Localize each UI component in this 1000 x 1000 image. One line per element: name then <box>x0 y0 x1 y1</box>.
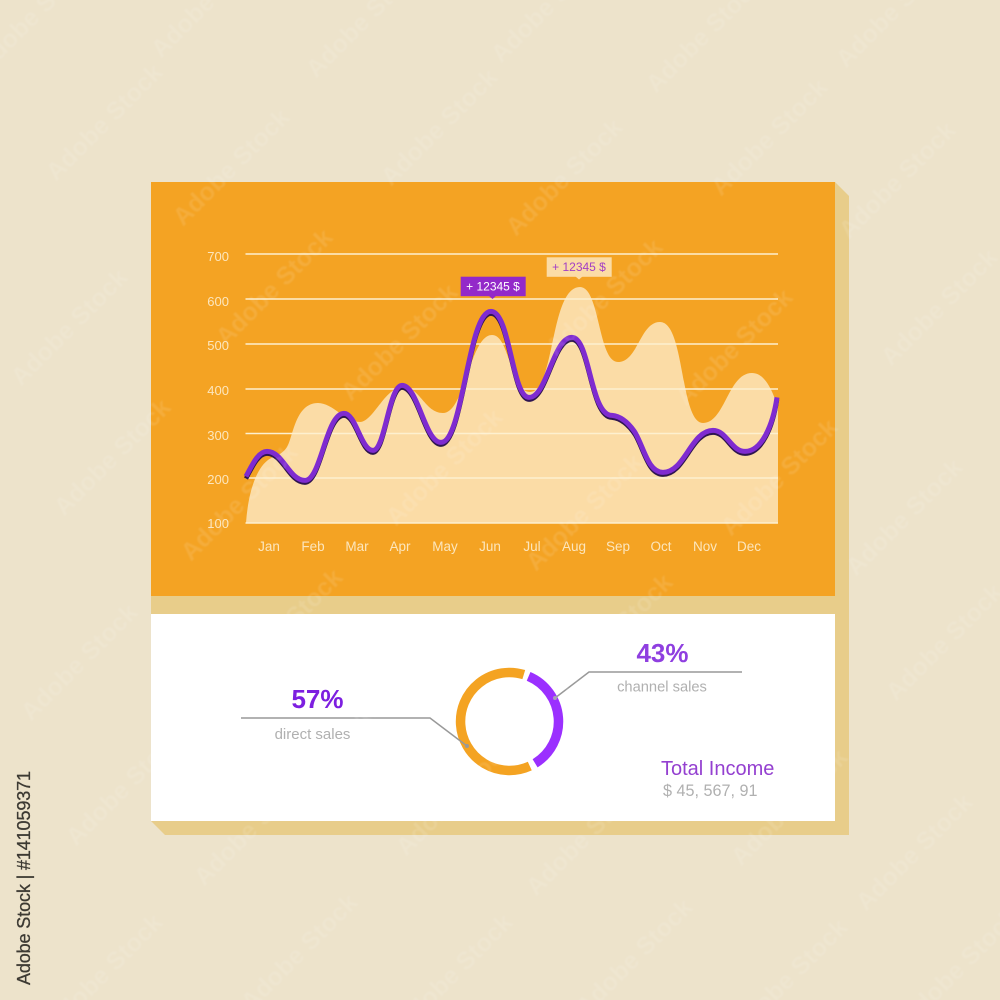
x axis month labels: Jul <box>523 539 541 554</box>
x axis month labels: Jun <box>479 539 501 554</box>
watermark pattern: Adobe Stock <box>220 563 348 691</box>
watermark pattern: Adobe Stock <box>833 116 961 244</box>
watermark pattern: Adobe Stock <box>520 773 648 901</box>
watermark pattern: Adobe Stock <box>520 448 648 576</box>
tooltip: cream value <box>547 257 612 280</box>
area series <box>246 287 778 523</box>
watermark pattern: Adobe Stock <box>167 103 295 231</box>
leader line: channel sales <box>553 672 742 700</box>
watermark pattern: Adobe Stock <box>15 598 143 726</box>
watermark pattern: Adobe Stock <box>48 393 176 521</box>
watermark pattern: Adobe Stock <box>715 413 843 541</box>
x axis month labels: Aug <box>562 539 586 554</box>
y axis labels <box>207 249 229 531</box>
x axis month labels: Nov <box>693 539 717 554</box>
y axis labels: 300 <box>207 428 229 443</box>
y axis labels: 200 <box>207 472 229 487</box>
donut chart <box>461 672 558 770</box>
x axis month labels: May <box>432 539 458 554</box>
total income value: $ 45, 567, 91 <box>663 782 758 800</box>
tooltip: cream value: + 12345 $ <box>552 260 606 274</box>
watermark pattern: Adobe Stock <box>210 223 338 351</box>
purple trend line <box>246 311 777 483</box>
watermark pattern: Adobe Stock <box>500 113 628 241</box>
stat: direct sales percent: 57% <box>291 684 344 714</box>
y axis labels: 500 <box>207 338 229 353</box>
watermark pattern: Adobe Stock <box>375 63 503 191</box>
panel shadow <box>151 182 849 835</box>
x axis month labels: Oct <box>650 539 672 554</box>
watermark pattern: Adobe Stock <box>550 568 678 696</box>
watermark pattern: Adobe Stock <box>380 403 508 531</box>
y axis labels: 600 <box>207 294 229 309</box>
grid lines <box>246 254 778 523</box>
panel: line chart <box>151 182 835 596</box>
watermark pattern: Adobe Stock <box>175 438 303 566</box>
watermark pattern: Adobe Stock <box>390 733 518 861</box>
leader line: direct sales <box>241 718 469 748</box>
watermark pattern: Adobe Stock <box>840 453 968 581</box>
y axis labels: 400 <box>207 383 229 398</box>
x axis month labels <box>258 539 761 554</box>
watermark pattern: Adobe Stock <box>875 243 1000 371</box>
x axis month labels: Jan <box>258 539 280 554</box>
tooltip: purple value: + 12345 $ <box>466 280 520 294</box>
panel: sales summary <box>151 614 835 821</box>
y axis labels: 700 <box>207 249 229 264</box>
label: direct sales: direct sales <box>275 726 350 743</box>
watermark pattern: Adobe Stock <box>345 608 473 736</box>
x axis month labels: Apr <box>389 539 411 554</box>
x axis month labels: Feb <box>301 539 325 554</box>
x axis month labels: Dec <box>737 539 761 554</box>
label: channel sales: channel sales <box>617 680 707 696</box>
watermark pattern: Adobe Stock <box>40 58 168 186</box>
watermark pattern: Adobe Stock <box>5 263 133 391</box>
watermark pattern: Adobe Stock <box>670 283 798 411</box>
watermark pattern: Adobe Stock <box>188 763 316 891</box>
watermark pattern: Adobe Stock <box>725 743 853 871</box>
tooltip: purple value <box>461 277 526 299</box>
x axis month labels: Mar <box>345 539 369 554</box>
watermark pattern: Adobe Stock <box>850 788 978 916</box>
x axis month labels: Sep <box>606 539 630 554</box>
total income heading: Total Income <box>661 758 774 780</box>
y axis labels: 100 <box>207 516 229 531</box>
watermark pattern: Adobe Stock <box>335 278 463 406</box>
watermark pattern: Adobe Stock <box>705 73 833 201</box>
watermark pattern: Adobe Stock <box>680 618 808 746</box>
watermark pattern: Adobe Stock <box>540 233 668 361</box>
watermark pattern: Adobe Stock <box>60 723 188 851</box>
stat: channel sales percent: 43% <box>636 638 689 668</box>
stock id caption: Adobe Stock | #141059371 <box>14 771 34 985</box>
